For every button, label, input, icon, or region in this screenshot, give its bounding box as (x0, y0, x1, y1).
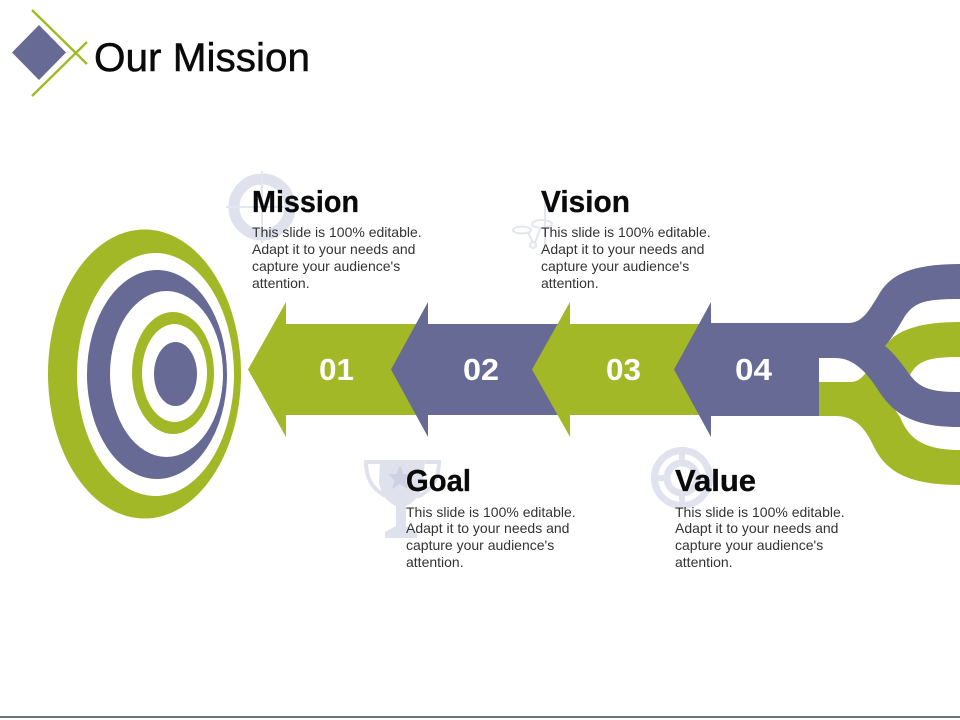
icon: value target (651, 447, 713, 509)
text block: Goal: Adapt it to your needs and (406, 520, 569, 536)
text block: Goal: This slide is 100% editable. (406, 504, 576, 520)
heading: Value: Value (675, 463, 756, 498)
heading: Goal: Goal (406, 463, 471, 498)
ribbon: lower green (819, 370, 960, 485)
arrow 01: 01 (319, 352, 354, 387)
heading: Vision: Vision (541, 184, 630, 219)
text block: Vision: attention. (541, 275, 599, 291)
heading: Mission: Mission (252, 184, 359, 219)
text block: Goal: attention. (406, 554, 464, 570)
arrow 03: 03 (606, 352, 641, 387)
text block: Mission: Adapt it to your needs and (252, 241, 415, 257)
icon: goal trophy (366, 460, 439, 538)
arrow 04 with blue ribbon: 04 (735, 352, 773, 387)
arrow 02 (391, 302, 565, 437)
arrow 02: 02 (463, 352, 499, 387)
text block: Value: attention. (675, 554, 733, 570)
icon: vision compass (513, 200, 552, 250)
text block: Value: Adapt it to your needs and (675, 520, 838, 536)
logo: diamond with crossed lines (12, 10, 87, 96)
arrow 01 (248, 302, 425, 437)
text block: Mission: This slide is 100% editable. (252, 224, 422, 240)
footer line (0, 716, 960, 718)
concentric target (48, 230, 241, 518)
ribbon: upper green (885, 322, 960, 375)
title: Our Mission (94, 36, 310, 80)
text block: Mission: capture your audience's (252, 258, 400, 274)
text block: Vision: Adapt it to your needs and (541, 241, 704, 257)
text block: Value: This slide is 100% editable. (675, 504, 845, 520)
arrow 04 with blue ribbon (674, 264, 960, 437)
icon: mission crosshair (226, 171, 298, 243)
text block: Goal: capture your audience's (406, 537, 554, 553)
text block: Mission: attention. (252, 275, 310, 291)
text block: Value: capture your audience's (675, 537, 823, 553)
text block: Vision: capture your audience's (541, 258, 689, 274)
arrow 03 (532, 302, 705, 437)
text block: Vision: This slide is 100% editable. (541, 224, 711, 240)
